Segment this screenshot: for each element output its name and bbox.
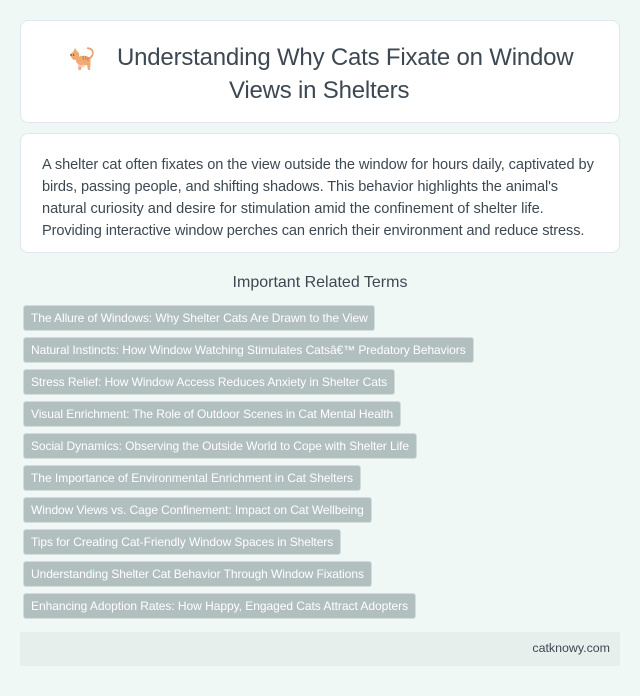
icon: cat: [70, 47, 94, 70]
term tag 8: Tips for Creating Cat-Friendly Window Spaces in Shelters: [31, 535, 333, 549]
term tag 4: Visual Enrichment: The Role of Outdoor Scenes in Cat Mental Health: [31, 407, 393, 421]
term tag 1: The Allure of Windows: Why Shelter Cats Are Drawn to the View: [31, 311, 368, 325]
term tag 10: [23, 593, 416, 619]
term tag 5: [23, 433, 417, 459]
term tag 10: Enhancing Adoption Rates: How Happy, Engaged Cats Attract Adopters: [31, 599, 408, 613]
term tag 9: Understanding Shelter Cat Behavior Through Window Fixations: [31, 567, 364, 581]
term tag 3: Stress Relief: How Window Access Reduces Anxiety in Shelter Cats: [31, 375, 387, 389]
panel: intro text: [20, 133, 620, 253]
term tag 6: The Importance of Environmental Enrichment in Cat Shelters: [31, 471, 353, 485]
text block: intro paragraph: A shelter cat often fixates on the view outside the window for hours daily, captivated by: [42, 157, 594, 173]
text block: intro paragraph: birds, passing people, and shifting shadows. This behavior highlights the animal's: [42, 179, 558, 195]
term tag 8: [23, 529, 341, 555]
text block: intro paragraph: [42, 157, 594, 239]
term tag 7: Window Views vs. Cage Confinement: Impact on Cat Wellbeing: [31, 503, 364, 517]
title: Views in Shelters: [229, 77, 409, 104]
term tag 7: [23, 497, 372, 523]
title: Understanding Why Cats Fixate on Window: [117, 44, 573, 71]
text block: intro paragraph: Providing interactive window perches can enrich their environment and reduce stress.: [42, 223, 584, 239]
list: related terms: [23, 305, 474, 619]
term tag 6: [23, 465, 361, 491]
term tag 9: [23, 561, 372, 587]
term tag 1: [23, 305, 375, 331]
title: [117, 44, 574, 104]
footer: [20, 632, 620, 666]
term tag 3: [23, 369, 395, 395]
term tag 4: [23, 401, 401, 427]
footer: catknowy.com: [532, 641, 610, 655]
text block: intro paragraph: natural curiosity and desire for stimulation amid the confinement of shelter life.: [42, 201, 544, 217]
term tag 2: Natural Instincts: How Window Watching Stimulates Catsâ€™ Predatory Behaviors: [31, 343, 466, 357]
term tag 2: [23, 337, 474, 363]
panel: title card: [20, 20, 620, 123]
term tag 5: Social Dynamics: Observing the Outside World to Cope with Shelter Life: [31, 439, 409, 453]
heading: important related terms: Important Related Terms: [233, 274, 407, 291]
